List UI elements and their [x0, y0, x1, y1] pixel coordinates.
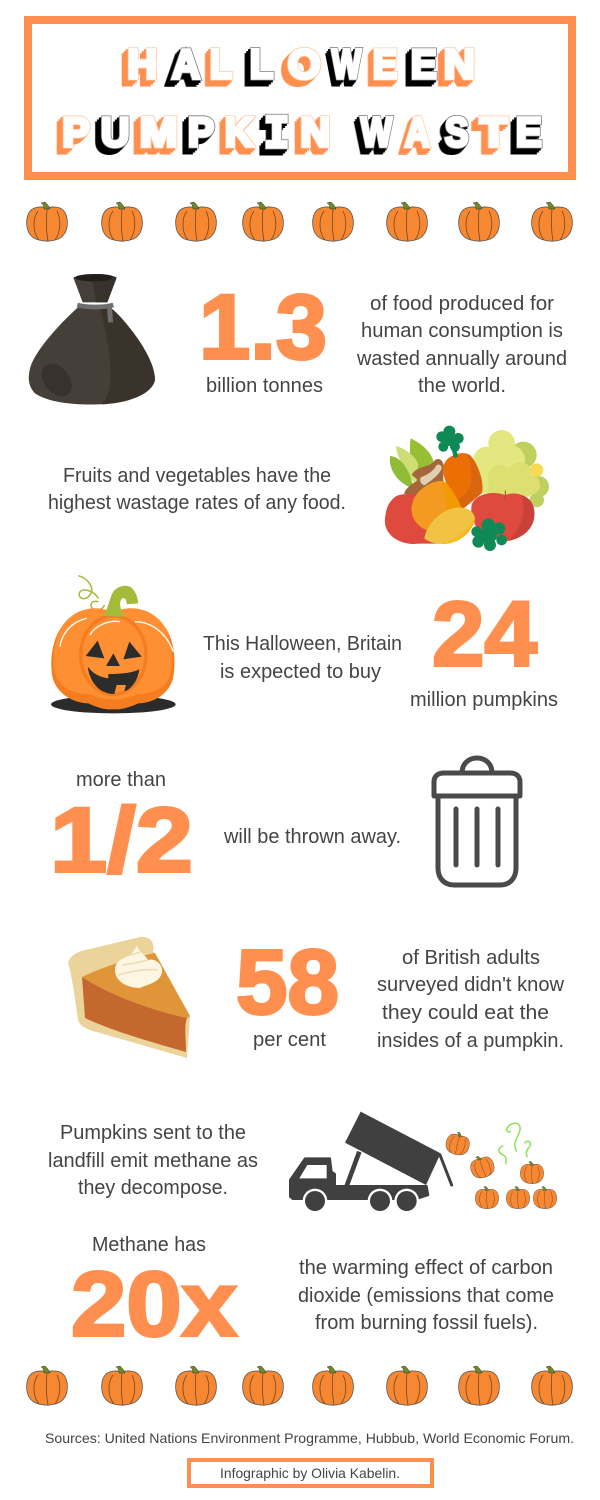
text: this Halloween: This Halloween, Britain: [203, 632, 402, 655]
icon: pumpkin pie slice: [68, 937, 190, 1058]
text: food produced: [356, 292, 567, 397]
text: British adults: insides of a pumpkin.: [377, 1029, 564, 1052]
pumpkin row bottom: [27, 1366, 572, 1405]
text: landfill: landfill emit methane as: [48, 1149, 258, 1172]
title: Halloween Pumpkin Waste: H: [128, 41, 157, 87]
text: British adults: [377, 946, 564, 1052]
text: warming effect: dioxide (emissions that come: [298, 1284, 554, 1307]
title: Halloween Pumpkin Waste: O: [288, 41, 320, 87]
text: sources: Sources: United Nations Environment Programme, Hubbub, World Economic Forum.: [45, 1430, 574, 1446]
title: Halloween Pumpkin Waste: U: [101, 109, 129, 155]
title: Halloween Pumpkin Waste: A: [404, 109, 429, 155]
title: Halloween Pumpkin Waste: A: [172, 41, 200, 87]
title: Halloween Pumpkin Waste: W: [332, 41, 361, 87]
title: Halloween Pumpkin Waste: I: [264, 109, 289, 161]
title: Halloween Pumpkin Waste: W: [360, 109, 391, 155]
title line 1: [122, 41, 475, 87]
icon: garbage bag: [29, 274, 155, 404]
text: landfill: Pumpkins sent to the: [60, 1121, 246, 1144]
text: billion tonnes: billion tonnes: [206, 374, 323, 397]
title: Halloween Pumpkin Waste: P: [62, 109, 90, 155]
text: British adults: of British adults: [402, 946, 540, 969]
icon: dump truck with pumpkins: [290, 1112, 557, 1213]
text: landfill: [48, 1121, 258, 1199]
title: Halloween Pumpkin Waste: L: [250, 41, 273, 87]
text: British adults: surveyed didn't know: [377, 973, 564, 996]
text: per cent: per cent: [253, 1028, 326, 1051]
title line 2: [56, 109, 543, 161]
credit box: [189, 1460, 432, 1486]
text: food produced: the world.: [418, 374, 506, 397]
credit box: Infographic by Olivia Kabelin.: [220, 1465, 400, 1481]
text: fruits and vegetables: highest wastage rates of any food.: [48, 491, 346, 514]
stat: 1.3: 1.3: [199, 276, 327, 378]
text: this Halloween: is expected to buy: [220, 660, 382, 683]
text: warming effect: [298, 1256, 554, 1334]
text: warming effect: from burning fossil fuels).: [315, 1311, 538, 1334]
title: Halloween Pumpkin Waste: E: [411, 41, 436, 87]
text: landfill: they decompose.: [78, 1176, 228, 1199]
text: more than: more than: [76, 768, 166, 791]
text: British adults: they could eat the: [382, 1001, 549, 1024]
title: Halloween Pumpkin Waste: E: [516, 109, 541, 155]
text: will be thrown away: will be thrown away.: [223, 825, 401, 848]
title: Halloween Pumpkin Waste: S: [445, 109, 469, 155]
text: warming effect: the warming effect of carbon: [299, 1256, 553, 1279]
stat: 20x: 20x: [71, 1254, 237, 1356]
title: Halloween Pumpkin Waste: P: [188, 109, 214, 155]
text: million pumpkins: million pumpkins: [410, 688, 558, 711]
title: Halloween Pumpkin Waste: [56, 41, 543, 161]
title: Halloween Pumpkin Waste: K: [225, 109, 253, 155]
text: this Halloween: [203, 632, 402, 683]
icon: trash can: [434, 758, 520, 885]
stat: 1/2: 1/2: [50, 790, 193, 892]
text: food produced: of food produced for: [370, 292, 554, 315]
title: Halloween Pumpkin Waste: T: [480, 109, 507, 155]
icon: jack-o-lantern: [51, 576, 176, 713]
stat: 24: 24: [432, 584, 537, 686]
text: food produced: human consumption is: [361, 319, 563, 342]
title: Halloween Pumpkin Waste: N: [300, 109, 330, 155]
title panel: [24, 16, 576, 180]
title: Halloween Pumpkin Waste: E: [373, 41, 397, 87]
title: Halloween Pumpkin Waste: L: [210, 41, 232, 87]
title: Halloween Pumpkin Waste: M: [140, 109, 178, 155]
text: fruits and vegetables: [48, 464, 346, 514]
text: Methane has: Methane has: [92, 1233, 206, 1256]
text: fruits and vegetables: Fruits and vegetables have the: [63, 464, 331, 487]
icon: fruit and vegetables: [385, 426, 549, 551]
pumpkin row top: [27, 202, 572, 241]
title: Halloween Pumpkin Waste: N: [444, 41, 475, 87]
text: food produced: wasted annually around: [356, 347, 567, 370]
stat: 58: 58: [236, 932, 339, 1034]
